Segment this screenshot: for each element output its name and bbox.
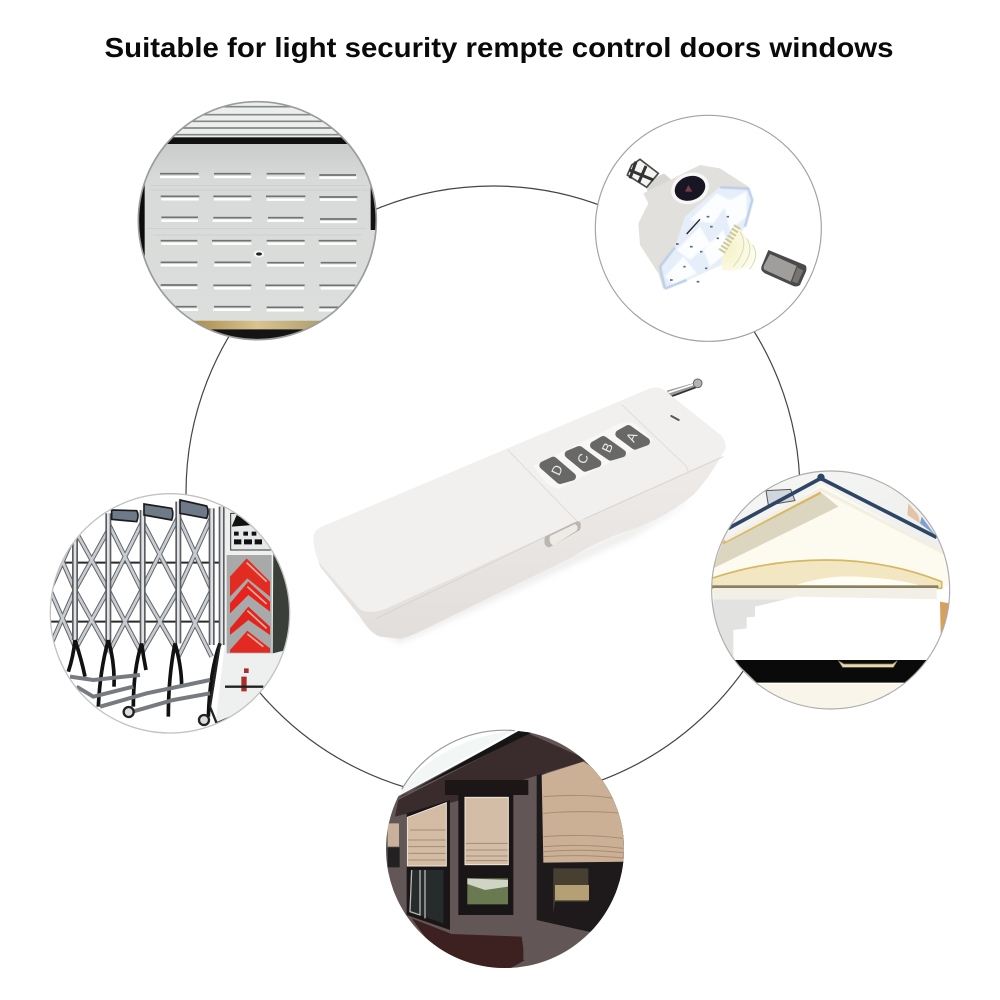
connecting ring — [186, 186, 800, 800]
button A — [619, 429, 646, 446]
camera lens — [667, 167, 713, 209]
soffit — [395, 733, 588, 817]
button panel seams — [507, 405, 688, 521]
right glass — [553, 868, 588, 913]
left shutter slats — [408, 830, 446, 860]
button D: D — [548, 463, 566, 478]
pediment eave shadow — [713, 492, 838, 568]
door panel — [133, 144, 383, 321]
antenna — [667, 379, 702, 397]
lower roof — [412, 918, 525, 973]
roof fascia — [398, 731, 532, 798]
photo: retractable gate — [50, 494, 300, 740]
small handheld remote — [761, 250, 806, 286]
LED white patches — [665, 192, 747, 285]
bulb neck — [647, 173, 673, 203]
body seam — [377, 457, 723, 618]
far left window — [388, 823, 399, 847]
sky — [402, 730, 515, 793]
remote side shell — [315, 447, 725, 639]
small vent — [766, 489, 795, 505]
cornice band — [712, 585, 938, 588]
arch white underside — [797, 576, 922, 586]
tan threshold — [194, 320, 320, 330]
column dark panel — [230, 512, 271, 550]
handle — [838, 661, 897, 667]
forked post feet — [68, 640, 220, 717]
sky wall — [718, 472, 942, 554]
signal waves — [722, 225, 762, 270]
rolled slats — [174, 102, 341, 138]
column right dark strip — [272, 554, 289, 654]
left window frame — [407, 800, 450, 930]
header beam — [445, 780, 528, 795]
gate circle border — [50, 494, 290, 733]
vertical posts — [75, 502, 222, 645]
photo: remote light bulb — [595, 115, 821, 341]
remote shadow — [350, 500, 693, 643]
base rails — [70, 675, 210, 713]
right frame edge — [370, 187, 376, 230]
dark slot — [687, 219, 700, 234]
embossed dashes: highlights — [160, 177, 357, 310]
column black blocks — [232, 515, 262, 544]
post caps — [112, 500, 208, 522]
central product: remote control — [313, 379, 726, 643]
sky arc border — [402, 730, 515, 789]
bulb circle border — [595, 115, 821, 341]
wall — [385, 732, 628, 970]
arched pediment — [712, 560, 942, 588]
roof dark edge — [728, 478, 937, 537]
gold eave trim — [723, 493, 821, 543]
white rake board — [725, 489, 943, 553]
button A: A — [623, 430, 641, 444]
left lower window — [410, 870, 443, 923]
driveway — [757, 684, 907, 713]
far left lower — [388, 847, 400, 867]
center glass highlight — [467, 878, 508, 890]
lattice bars dark edges — [50, 517, 212, 657]
photo: garage door — [133, 100, 383, 343]
title: Suitable for light security rempte control doors windows — [104, 32, 894, 63]
button B: B — [599, 440, 616, 455]
keyhole — [254, 250, 264, 258]
button D — [543, 461, 572, 480]
center glass — [467, 878, 508, 904]
left frame dark sliver — [139, 184, 145, 257]
peach panel — [907, 503, 920, 523]
LED cluster — [659, 187, 752, 289]
right window frame — [537, 758, 628, 933]
door seams — [147, 185, 370, 235]
button recess — [533, 422, 653, 488]
center shutter — [465, 797, 508, 865]
remote top face — [313, 388, 726, 612]
horizontal track rods — [50, 563, 222, 622]
white garage wall — [733, 597, 942, 660]
lower deck — [523, 933, 588, 960]
wheels — [124, 707, 209, 725]
LED speckle — [670, 217, 729, 282]
left shutter — [407, 803, 446, 866]
center shutter slats — [466, 843, 508, 861]
center window frame — [458, 793, 513, 915]
black header bar — [168, 137, 348, 144]
roof peak — [817, 474, 825, 481]
lattice bars light faces — [50, 517, 212, 657]
garage circle border — [138, 102, 376, 340]
blue corner — [920, 517, 935, 535]
pediment fill — [710, 484, 950, 587]
black opening — [733, 660, 930, 683]
vertical post highlights — [75, 502, 222, 645]
button B — [594, 440, 622, 457]
right shutter — [542, 762, 628, 863]
red mark — [241, 668, 249, 691]
right shutter slats — [543, 795, 623, 858]
embossed dashes: dark lines — [160, 174, 357, 307]
control column — [216, 508, 283, 722]
photo: house eave — [710, 470, 953, 713]
indicator LED — [671, 416, 679, 420]
button C — [569, 450, 597, 468]
column lower edge — [210, 643, 263, 723]
bulb housing — [638, 165, 752, 288]
left lower window frame — [410, 870, 425, 918]
bulb socket — [627, 159, 658, 187]
orange corner — [940, 602, 949, 633]
slide switch — [544, 521, 581, 547]
photo: roller shutter windows — [385, 730, 628, 973]
eave circle border — [712, 471, 950, 709]
chevron sign — [227, 555, 272, 653]
frieze — [713, 588, 937, 599]
button C: C — [574, 451, 592, 466]
black floor — [210, 329, 304, 339]
right glass reflection — [555, 885, 589, 900]
LED blue edge shading — [660, 187, 752, 289]
soffit grey — [713, 599, 940, 680]
